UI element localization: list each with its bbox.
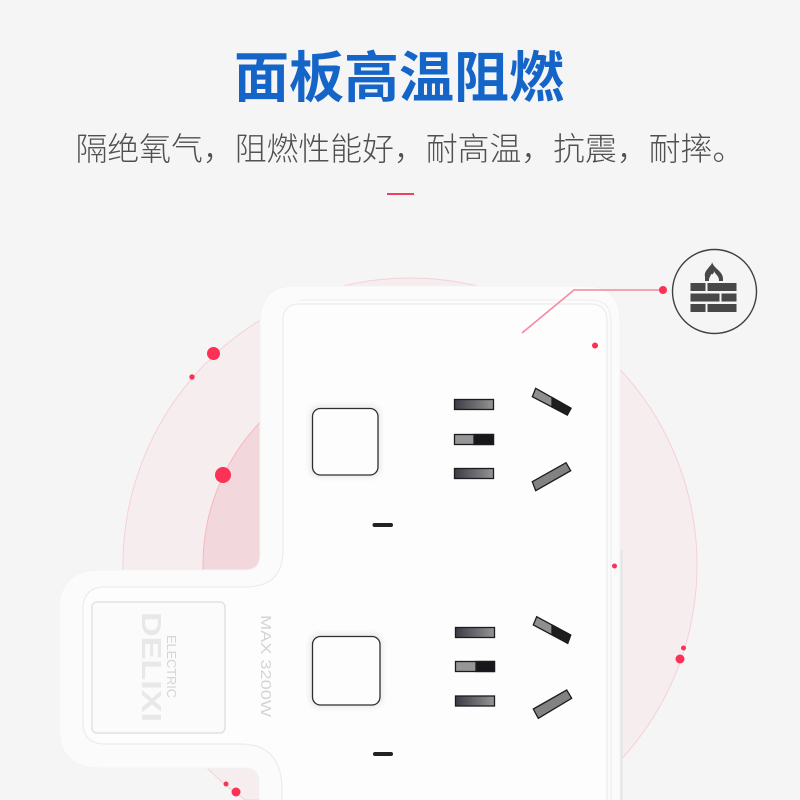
upper indicator light (372, 523, 393, 527)
strip inner panel groove (83, 304, 607, 800)
brand label plate (92, 602, 225, 733)
strip edge shadow (620, 550, 622, 800)
decorative red dots (189, 342, 686, 796)
brand sub text embossed: ELECTRIC (164, 635, 178, 698)
outer pink circle (123, 278, 697, 800)
callout line (522, 290, 663, 333)
title: 面板高温阻燃 (234, 47, 564, 109)
power strip body (59, 286, 622, 800)
inner pink circle (203, 358, 617, 772)
callout dot (659, 286, 667, 294)
icon: flame on brick wall (672, 250, 756, 334)
lower socket (456, 617, 572, 718)
second groove line (300, 300, 611, 800)
subtitle text: 隔绝氧气，阻燃性能好，耐高温，抗震，耐摔。 (76, 131, 744, 167)
rating text embossed: MAX 3200W (257, 615, 274, 718)
accent red divider (387, 193, 414, 195)
upper socket (454, 388, 571, 491)
upper switch (309, 405, 381, 478)
lower indicator light (373, 752, 393, 756)
lower switch (309, 633, 383, 708)
brand name embossed: DELIXI (136, 612, 167, 722)
strip outer shell (59, 286, 620, 800)
